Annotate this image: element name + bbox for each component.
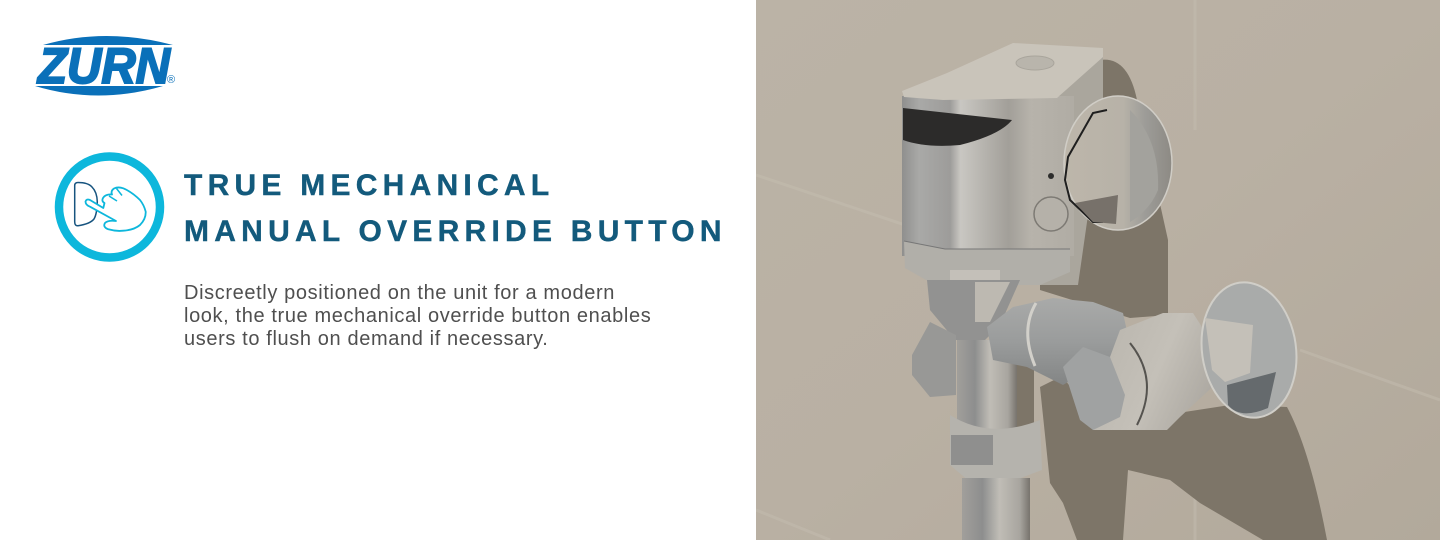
- transparent side cover: [1064, 96, 1172, 230]
- icon: finger pressing button: [54, 152, 164, 262]
- valve head: [902, 43, 1103, 285]
- pipe and bottom section: [912, 280, 1042, 540]
- description text: users to flush on demand if necessary.: [184, 328, 548, 350]
- horizontal supply arm: [987, 298, 1223, 430]
- description text: [184, 282, 651, 350]
- heading: TRUE MECHANICAL: [184, 169, 554, 202]
- description text: Discreetly positioned on the unit for a modern: [184, 282, 615, 304]
- photo: flush valve on concrete wall: [756, 0, 1440, 540]
- logo: Zurn: ®: [167, 74, 175, 86]
- description text: look, the true mechanical override button enables: [184, 305, 651, 327]
- wall shadows: [1040, 60, 1327, 540]
- heading: MANUAL OVERRIDE BUTTON: [184, 215, 727, 248]
- heading: [184, 169, 727, 248]
- wall flange: [1193, 276, 1305, 424]
- logo: Zurn: ZURN: [36, 38, 171, 94]
- wall: [756, 0, 1440, 540]
